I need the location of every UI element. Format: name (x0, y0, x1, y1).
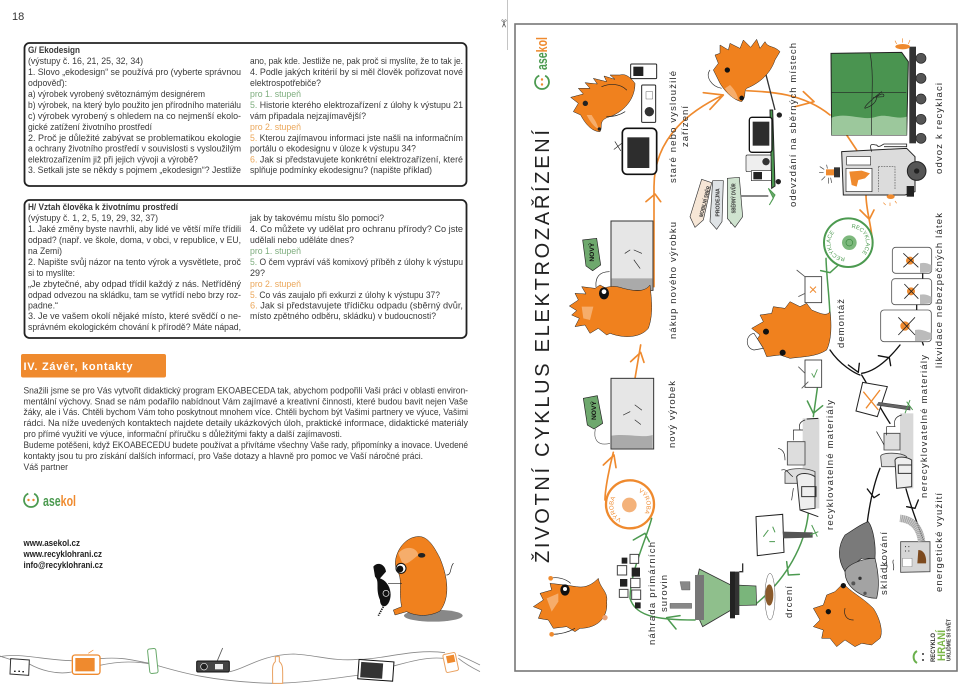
box: new product in shop (611, 221, 653, 290)
arrows: orange flow lower (603, 345, 644, 500)
page number: 18 (12, 11, 24, 23)
logo: Recyklohraní: UKLIĎME SI SVĚT (944, 619, 952, 661)
circle: výroba wheel: VÝROBA (640, 488, 651, 514)
panel: H Vztah člověka k životnímu prostředí (24, 200, 466, 338)
panel: G Ekodesign: 1. Slovo „ekodesign“ se používá pro (vyberte správnou (28, 67, 241, 77)
panel: G Ekodesign: ano, pak kde. Jestliže ne, pak proč si myslíte, že to tak je. (250, 56, 463, 66)
barrels: hazardous substances (881, 247, 932, 342)
icon: old mobile phone (631, 64, 657, 79)
panel: G Ekodesign: 4. Podle jakých kritérií by si měl člověk pořizovat nové (250, 67, 463, 77)
heading: IV. Závěr, kontakty: IV. Závěr, kontakty (24, 361, 133, 373)
tag: NOVÝ: NOVÝ (587, 242, 596, 262)
panel: H Vztah člověka k životnímu prostředí: pro 2. stupeň (250, 279, 301, 289)
step labels: odevzdání na sběrných místech (788, 43, 799, 207)
panel: H Vztah člověka k životnímu prostředí: si to myslíte: (28, 268, 75, 278)
panel: G Ekodesign: vám připadala nejzajímavější? (250, 111, 366, 121)
raw materials: black and white cubes (533, 378, 735, 637)
panel: G Ekodesign: 5. Kterou zajímavou informaci jste našli na informačním (250, 133, 463, 143)
signpost: sběrný dvůr and cart: SBĚRNÝ DVŮR (730, 183, 738, 213)
panel: G Ekodesign: elektrozařízením již při jejich vývoji a výrobě? (28, 154, 198, 164)
circle: recyklace wheel (823, 217, 874, 268)
panel: H Vztah člověka k životnímu prostředí: 5. O čem vypráví váš komixový příběh z úlohy k výstupu (250, 257, 463, 267)
step labels: staré nebo vysloužilé (668, 71, 679, 183)
step labels: likvidace nebezpečných látek (934, 213, 945, 368)
panel: G Ekodesign: a) výrobek vyrobený světoznámým designérem (28, 89, 205, 99)
step labels: surovin (659, 575, 670, 612)
box: recyclable part (798, 360, 822, 388)
machine: grinder with plant (670, 569, 735, 627)
contacts: info@recyklohrani.cz (24, 560, 103, 570)
circle: výroba wheel (604, 479, 696, 630)
panel: H Vztah člověka k životnímu prostředí: padne.“ (28, 300, 58, 310)
panel: G Ekodesign: 2. Proč je důležité zabývat se problematikou ekologie (28, 133, 241, 143)
sign: recycling (756, 514, 818, 556)
logo: asekol rotated (534, 37, 551, 89)
panel: H Vztah člověka k životnímu prostředí: jak by takovému místu šlo pomoci? (249, 213, 384, 223)
icon: old television (614, 128, 657, 174)
panel: H Vztah člověka k životnímu prostředí: 6. Jak si představujete třídičku odpadu (sběrný dvůr, (250, 300, 463, 310)
circle: recyklace wheel: RECYKLACE (852, 224, 870, 256)
panel: H Vztah člověka k životnímu prostředí: správném ekologickém chování k přírodě? Máte nápad, (28, 322, 241, 332)
machine: recyclable materials press (778, 418, 819, 517)
landfill (839, 522, 878, 598)
machine: shredder (730, 563, 757, 615)
text block: closing paragraph: Váš partner (24, 462, 68, 472)
panel: H Vztah člověka k životnímu prostředí: 3. Je ve vašem okolí nějaké místo, které svědčí o ne- (28, 311, 241, 321)
logo: Recyklohraní: RECYKLO (931, 633, 937, 662)
hamster: raw material substitution (533, 576, 608, 637)
text block: closing paragraph: Snažili jsme se pro Vás vytvořit didaktický program EKOABECEDA tak, abychom podpořili Vaši práci v oblasti environ- (24, 386, 468, 396)
panel: H Vztah člověka k životnímu prostředí: pro 1. stupeň (250, 246, 301, 256)
panel: G Ekodesign: splňuje podmínky ekodesignu? (napište příklad) (250, 165, 432, 175)
panel: G Ekodesign: portálu o ekodesignu v úloze k výstupu 34? (250, 144, 416, 154)
text block: closing paragraph: žáky, ale i Vás. Chtěli bychom Vám toho poskytnout mnohem více. Chtěli bychom být Vašimi partnery ve výuce, Vašimi (24, 407, 468, 417)
signposts: PRODEJNA (716, 188, 722, 217)
arrows: material flow (757, 325, 923, 603)
text block: closing paragraph: mentální výchovy. Snad se nám podařilo nabídnout Vám zajímavé a kreativní činnosti, které budou bavit nejen Vaše (24, 396, 468, 406)
icon: old radio (642, 85, 656, 122)
panel: H Vztah člověka k životnímu prostředí: 1. Jaké změny byste navrhli, aby lidé ve větší míře třídili (28, 224, 241, 234)
lower right scene (730, 382, 930, 647)
step labels: demontáž (836, 299, 847, 348)
hamster: buying new product (569, 272, 652, 337)
panel: G Ekodesign: c) výrobek vyrobený s ohledem na co nejmenší ekolo- (28, 111, 241, 121)
tag: NOVÝ (583, 238, 601, 271)
panel: H Vztah člověka k životnímu prostředí: H/ Vztah člověka k životnímu prostředí (28, 202, 178, 212)
tag: NOVÝ (583, 396, 610, 444)
step labels: odvoz k recyklaci (934, 83, 945, 174)
panel: H Vztah člověka k životnímu prostředí: odpad odvezou na skládku, tam se vytřídí nebo brzy roz- (28, 290, 241, 300)
text block: closing paragraph: rádci. Na níže uvedených kontaktech najdete detaily ukázkových úloh, praktické informace, didaktické materiály (24, 418, 468, 428)
text block: closing paragraph (24, 386, 468, 472)
panel: G Ekodesign: (výstupy č. 16, 21, 25, 32, 34) (28, 56, 143, 66)
panel: H Vztah člověka k životnímu prostředí: „Je zbytečné, aby odpad třídil každý z nás. Netříděný (28, 279, 241, 289)
step labels: nákup nového výrobku (668, 222, 679, 339)
hamster: dismantling (747, 302, 831, 358)
panel: G Ekodesign: elektrospotřebiče? (250, 78, 321, 88)
panel: G Ekodesign: b) výrobek, na který bylo použito jen přírodního materiálu (28, 100, 241, 110)
panel: G Ekodesign: a ochrany životního prostředí v souvislosti s vysloužilým (28, 144, 241, 154)
panel: G Ekodesign: pro 1. stupeň (250, 89, 301, 99)
hamster: holding old appliances (569, 64, 735, 337)
text block: closing paragraph: pro přímé využití ve výuce, informační příručku s důležitými fakty a další zajímavosti. (24, 429, 342, 439)
contacts (23, 538, 103, 570)
panel: G Ekodesign (24, 43, 466, 186)
panel: G Ekodesign: gické zatížení životního prostředí (28, 122, 152, 132)
signposts: MOBILNÍ SBĚR (697, 185, 712, 218)
logo: asekol rotated: asekol (534, 37, 551, 70)
cart: appliances on a cart (746, 62, 782, 188)
cut mark with scissors: ✂ (497, 19, 510, 28)
box: disassembled part (797, 270, 822, 303)
panel: H Vztah člověka k životnímu prostředí: udělali nebo uděláte dnes? (250, 235, 354, 245)
machine: energy recovery (886, 518, 930, 572)
sign: crossed recycling (856, 382, 913, 417)
panel: G Ekodesign: G/ Ekodesign (28, 45, 80, 55)
panel: G Ekodesign: pro 2. stupeň (250, 122, 301, 132)
truck: waste transport (819, 38, 926, 206)
box: new product (611, 378, 654, 449)
panel: G Ekodesign: 6. Jak si představujete konkrétní elektrozařízení, které (250, 154, 463, 164)
strip: appliances on a wire (0, 648, 480, 683)
hamster: dropping off at collection point (708, 39, 780, 102)
text block: closing paragraph: kontakty jsou tu pro získání dalších informací, pro Vaše dotazy a hlavně pro pomoc ve Vaší náročné práci. (24, 451, 423, 461)
signposts (690, 178, 735, 229)
panel: H Vztah člověka k životnímu prostředí: 2. Napište svůj názor na tento výrok a vysvětlete, proč (28, 257, 241, 267)
hamster: landfill (813, 583, 881, 647)
panel: G Ekodesign: 3. Setkali jste se někdy s pojmem „ekodesign“? Jestliže (28, 165, 241, 175)
step labels: náhrada primárních (647, 542, 658, 645)
contacts: www.asekol.cz (23, 538, 80, 548)
title: Životní cyklus elektrozařízení: ŽIVOTNÍ CYKLUS ELEKTROZAŘÍZENÍ (531, 130, 554, 563)
panel: H Vztah člověka k životnímu prostředí: na Zemi) (28, 246, 62, 256)
machine: non-recyclable materials press (877, 413, 913, 488)
panel: life cycle frame (515, 24, 957, 671)
panel: H Vztah člověka k životnímu prostředí: 5. Co vás zaujalo při exkurzi z úlohy k výstupu 37? (250, 290, 440, 300)
panel: H Vztah člověka k životnímu prostředí: 29? (250, 268, 265, 278)
wheels and arrows: truck to recycling (746, 90, 875, 318)
step labels (647, 43, 945, 645)
step labels: skládkování (879, 532, 890, 595)
panel: H Vztah člověka k životnímu prostředí: (výstupy č. 1, 2, 5, 19, 29, 32, 37) (28, 213, 158, 223)
step labels: drcení (784, 586, 795, 618)
circle: výroba wheel: VÝROBA (609, 497, 620, 522)
step labels: recyklovatelné materiály (825, 400, 836, 530)
step labels: nerecyklovatelné materiály (919, 355, 930, 498)
arrows: orange flow upper (646, 93, 723, 287)
step labels: zařízení (680, 106, 691, 147)
illustration: hamster with telephone (373, 536, 463, 622)
contacts: www.recyklohrani.cz (23, 549, 102, 559)
tag: NOVÝ: NOVÝ (589, 401, 598, 420)
panel: G Ekodesign: odpověď): (28, 78, 67, 88)
signpost: sběrný dvůr and cart (708, 38, 932, 388)
cut mark with scissors (497, 0, 510, 50)
logo: asekol (24, 493, 76, 510)
panel: H Vztah člověka k životnímu prostředí: místo zpětného odběru, skládku) v budoucnosti? (250, 311, 436, 321)
logo: asekol: asekol (43, 493, 76, 510)
pile: shredded material (765, 573, 775, 620)
text block: closing paragraph: Budeme potěšeni, když EKOABECEDU budete používat a přivítáme všechny Vaše rady, připomínky a inovace. Uvedené (24, 440, 468, 450)
heading: IV. Závěr, kontakty (21, 354, 166, 378)
circle: recyklace wheel: RECYKLACE (826, 230, 844, 262)
panel: G Ekodesign: 5. Historie kterého elektrozařízení z úlohy k výstupu 21 (250, 100, 463, 110)
step labels: nový výrobek (667, 381, 678, 448)
panel: H Vztah člověka k životnímu prostředí: odpad? (např. ve škole, doma, v obci, v republice, v EU, (28, 235, 241, 245)
panel: H Vztah člověka k životnímu prostředí: 4. Co můžete vy udělat pro ochranu přírody? Co jste (250, 224, 463, 234)
step labels: energetické využití (934, 493, 945, 592)
logo: Recyklohraní (914, 619, 952, 663)
logo: Recyklohraní: HRANÍ (935, 629, 948, 661)
